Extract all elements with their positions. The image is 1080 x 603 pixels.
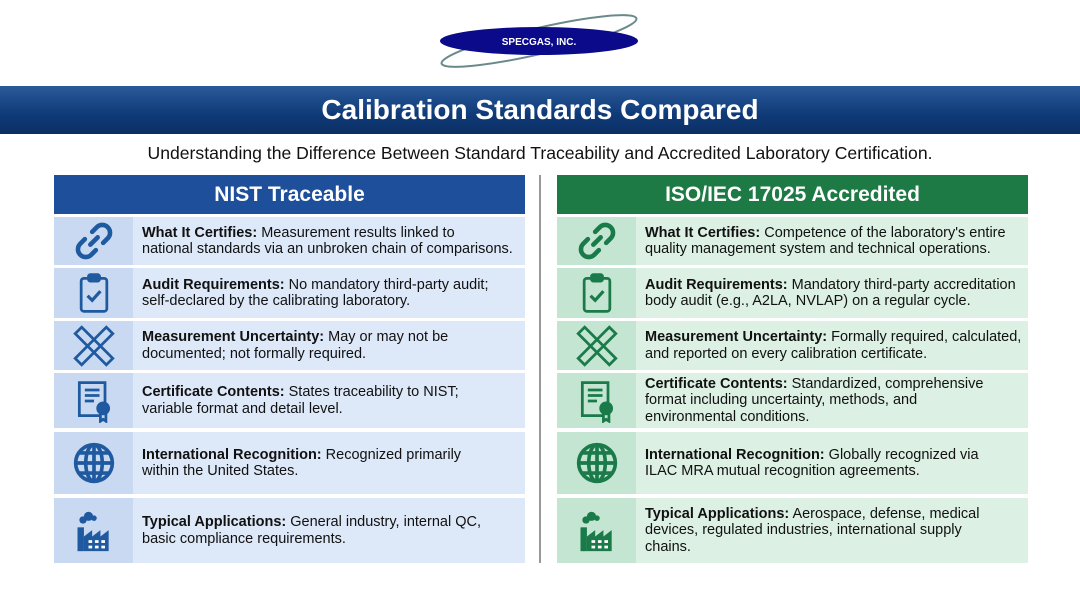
row: audit [54,268,525,318]
row: audit [557,268,1028,318]
panel: ISO/IEC 17025 [557,175,1028,563]
row: audit: Audit Requirements: No mandatory third-party audit; [142,276,488,292]
header: ISO [557,175,1028,214]
row: uncertainty: Measurement Uncertainty: Formally required, calculated, [645,329,1021,345]
row: recognition: International Recognition: Recognized primarily [142,446,461,462]
row: applications: Typical Applications: Aerospace, defense, medical [645,506,979,522]
header: NIST [54,175,525,214]
row: recognition [54,432,525,494]
row: uncertainty [54,321,525,370]
row: uncertainty: Measurement Uncertainty: May or may not be [142,329,448,345]
title banner: Calibration Standards Compared [321,94,759,125]
logo [440,14,638,68]
row: what it certifies [557,217,1028,265]
row: recognition: International Recognition: Globally recognized via [645,446,979,462]
row: applications: devices, regulated industries, international supply [645,522,962,538]
row: audit: body audit (e.g., A2LA, NVLAP) on a regular cycle. [645,293,971,309]
row: what it certifies: What It Certifies: Competence of the laboratory's entire [645,224,1006,240]
row: applications [557,498,1028,563]
row: what it certifies: quality management system and technical operations. [645,241,991,257]
row: recognition: within the United States. [142,463,298,479]
row: certificate [54,373,525,428]
row: what it certifies: What It Certifies: Measurement results linked to [142,224,455,240]
title banner [0,86,1080,134]
row: recognition: ILAC MRA mutual recognition agreements. [645,463,920,479]
row: certificate: format including uncertainty, methods, and [645,392,917,408]
row: applications: chains. [645,539,691,555]
row: certificate: Certificate Contents: States traceability to NIST; [142,384,459,400]
row: what it certifies: national standards via an unbroken chain of comparisons. [142,241,513,257]
row: recognition [557,432,1028,494]
row: what it certifies [54,217,525,265]
logo: SPECGAS, INC. [502,37,576,48]
row: applications: Typical Applications: General industry, internal QC, [142,514,481,530]
header: ISO: ISO/IEC 17025 Accredited [665,183,920,206]
subtitle: Understanding the Difference Between Standard Traceability and Accredited Laboratory Certification. [147,143,932,163]
row: certificate [557,373,1028,428]
panel: NIST Traceable [54,175,525,563]
row: applications [54,498,525,563]
row: certificate: Certificate Contents: Standardized, comprehensive [645,376,983,392]
row: certificate: variable format and detail level. [142,400,343,416]
row: uncertainty [557,321,1028,370]
header: NIST: NIST Traceable [214,183,365,206]
row: audit: self-declared by the calibrating laboratory. [142,293,410,309]
row: audit: Audit Requirements: Mandatory third-party accreditation [645,276,1016,292]
row: certificate: environmental conditions. [645,409,809,425]
row: uncertainty: and reported on every calibration certificate. [645,346,927,362]
row: uncertainty: documented; not formally required. [142,346,366,362]
row: applications: basic compliance requirements. [142,530,346,546]
